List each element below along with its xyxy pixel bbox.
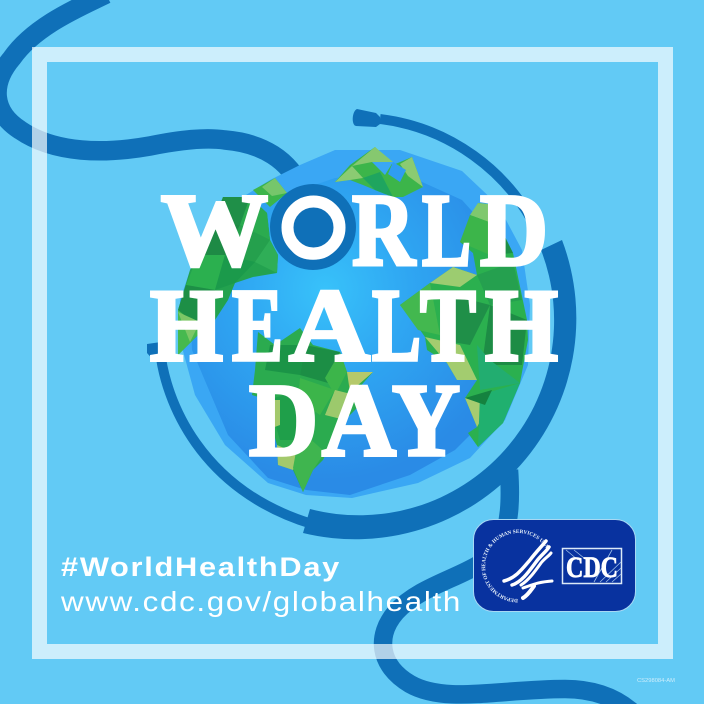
stethoscope thick arc (303, 240, 576, 539)
globe (178, 147, 530, 498)
title: H (485, 268, 558, 383)
title: L (422, 173, 471, 288)
title: A (289, 268, 370, 383)
hashtag: #WorldHealthDay (61, 552, 341, 582)
continent: north (335, 147, 423, 197)
globe inner shading (190, 172, 515, 495)
title: A (322, 363, 396, 478)
title: L (372, 268, 421, 383)
document code: CS298084-AM (637, 678, 675, 684)
stethoscope chest piece (270, 184, 356, 270)
title: D (249, 363, 318, 478)
title: O (283, 180, 343, 277)
title: W (161, 173, 268, 288)
title (150, 173, 558, 478)
title: D (480, 173, 548, 288)
stethoscope ear tube: thin arc (380, 119, 538, 232)
title: H (150, 268, 223, 383)
chest piece centre over the letter O (288, 202, 340, 254)
continent: south (252, 328, 373, 492)
HHS eagle icon (504, 541, 552, 598)
stethoscope thin arc: left (160, 350, 312, 524)
badge: HHS and CDC logos (473, 519, 636, 612)
stethoscope tip: left (147, 341, 168, 362)
title: Y (392, 363, 460, 478)
white frame (32, 47, 673, 659)
continent: east (400, 203, 528, 447)
stethoscope lower tube (383, 470, 642, 704)
globe ocean (180, 150, 530, 498)
title: T (420, 268, 476, 383)
stethoscope upper tube (0, 0, 308, 215)
HHS seal text: DEPARTMENT OF HEALTH & HUMAN SERVICES USA (482, 530, 548, 602)
stethoscope tip: top (353, 109, 380, 127)
website url: www.cdc.gov/globalhealth (60, 586, 462, 617)
title: E (232, 268, 283, 383)
continent: north-west (178, 178, 287, 355)
title: R (352, 173, 417, 288)
CDC logo: CDC (566, 551, 618, 584)
